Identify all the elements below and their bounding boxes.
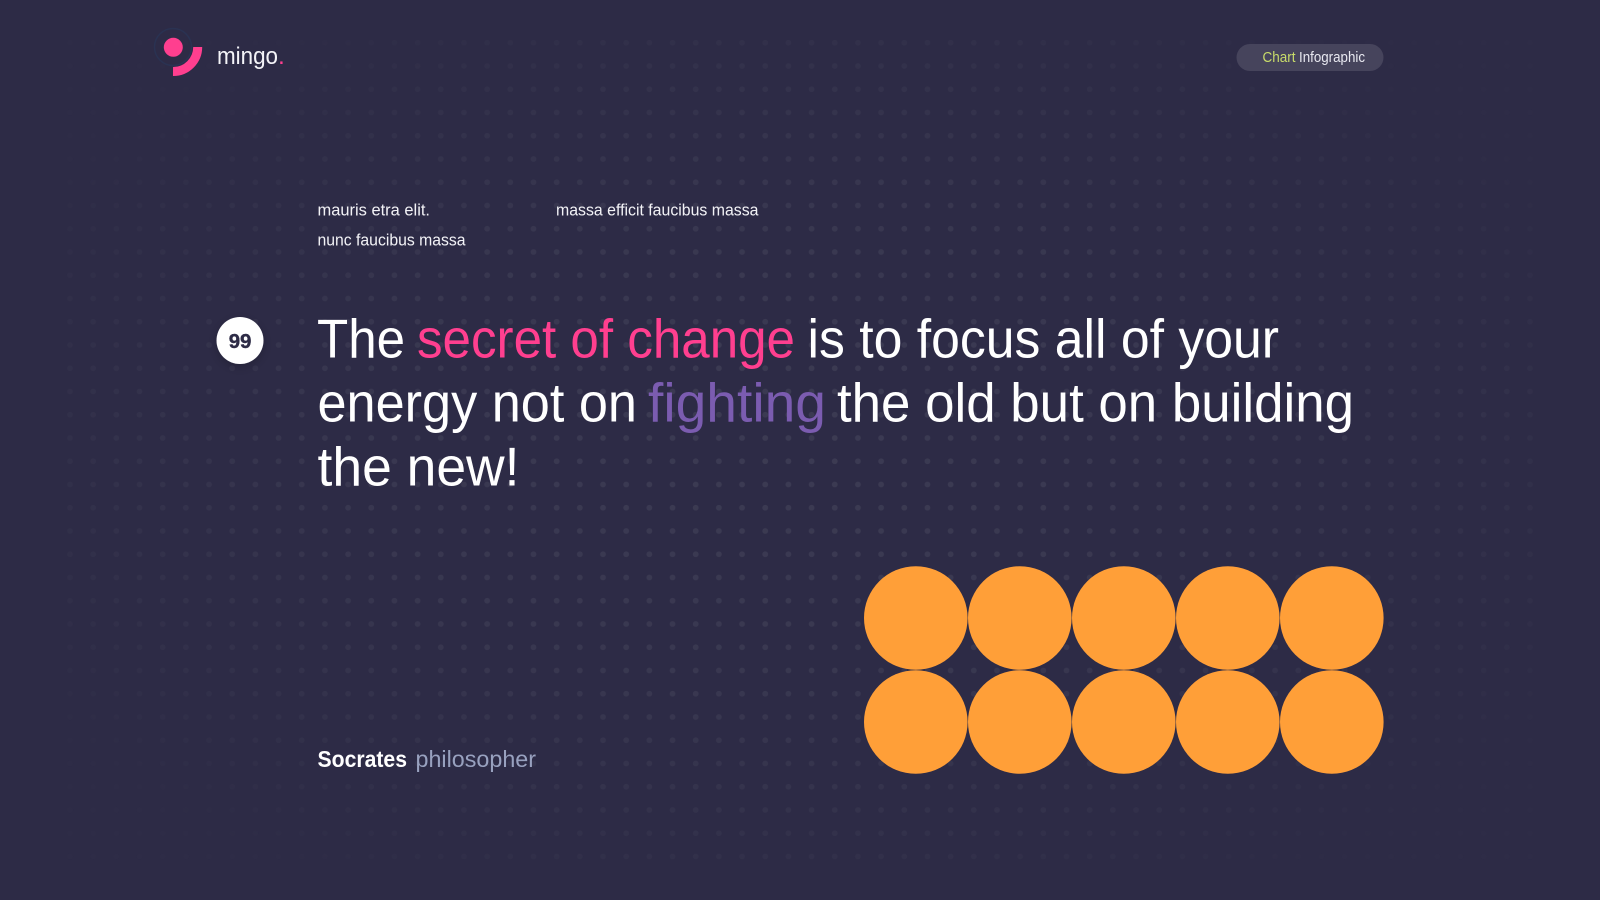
tag pill: Chart Infographic: Infographic [1299, 50, 1365, 66]
quote line 2: the old but on building [837, 372, 1354, 434]
tag pill: Chart Infographic [1236, 44, 1384, 71]
quote line 1 [317, 308, 1279, 370]
attribution [318, 746, 536, 772]
quote line 1: is to focus all of your [808, 308, 1279, 370]
logo: mingo [154, 28, 285, 72]
quote line 3: the new! [318, 436, 520, 498]
logo wordmark: mingo. [217, 43, 285, 70]
attribution: philosopher [416, 746, 536, 772]
attribution: Socrates [318, 746, 407, 772]
intro text block: nunc faucibus massa [318, 230, 466, 250]
intro text block [318, 200, 759, 250]
intro text block: massa efficit faucibus massa [556, 200, 759, 220]
tag pill: Chart Infographic: Chart [1262, 50, 1296, 66]
quote text [317, 308, 1354, 498]
quote line 2 [318, 372, 1354, 434]
quote line 1: secret of change [417, 308, 795, 370]
icon: quote mark badge: 99 [229, 330, 251, 353]
icon: quote mark badge [216, 317, 264, 364]
quote line 2: fighting [648, 372, 826, 434]
icon: logo mark [154, 28, 198, 72]
quote line 2: energy not on [318, 372, 637, 434]
chart: grid of ten orange circles [864, 566, 1384, 774]
quote line 1: The [317, 308, 405, 370]
intro text block: mauris etra elit. [318, 200, 430, 220]
